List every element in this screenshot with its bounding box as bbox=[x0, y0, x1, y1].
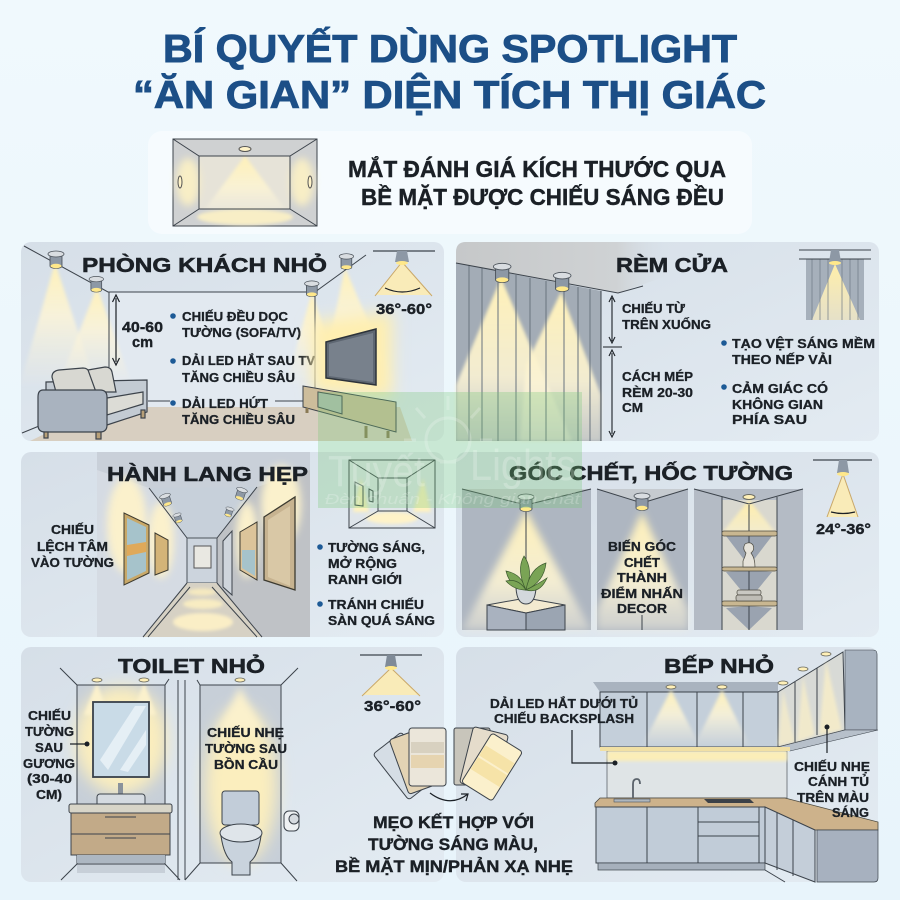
heading: GÓC CHẾT, HỐC TƯỜNG bbox=[509, 461, 793, 485]
icon: beam angle 36-60 bbox=[373, 251, 435, 318]
panel: narrow corridor bbox=[21, 452, 444, 637]
label: cabinet doors bbox=[794, 724, 870, 820]
left label: CHIẾU bbox=[51, 522, 94, 537]
upper cabinets bbox=[593, 650, 878, 751]
heading: PHÒNG KHÁCH NHỎ bbox=[82, 253, 327, 277]
labels: CM) bbox=[36, 788, 62, 802]
bullets: RANH GIỚI bbox=[328, 572, 402, 587]
bullets: SÀN QUÁ SÁNG bbox=[328, 613, 435, 628]
curtain bbox=[456, 263, 643, 441]
panel: intro bbox=[148, 131, 752, 234]
bullets: DẢI LED HỨT bbox=[182, 396, 268, 411]
dimension arrow 40-60 cm: cm bbox=[132, 334, 153, 351]
bullets bbox=[721, 336, 875, 427]
icon: colour swatches bbox=[373, 727, 523, 801]
arrows bbox=[603, 296, 622, 437]
tip text: MẸO KẾT HỢP VỚI bbox=[373, 813, 534, 832]
icon: beam angle 36-60: 36°-60° bbox=[364, 698, 421, 715]
bullets: TRÁNH CHIẾU bbox=[328, 597, 424, 612]
corridor scene bbox=[97, 452, 310, 637]
panel: curtains bbox=[456, 242, 879, 441]
watermark text bbox=[325, 441, 581, 508]
intro text bbox=[348, 155, 726, 210]
left label: LỆCH TÂM bbox=[37, 539, 108, 554]
bullets: DẢI LED HẮT SAU TV bbox=[182, 353, 316, 368]
light cones bbox=[20, 263, 396, 385]
corridor spots bbox=[159, 486, 248, 524]
labels: CÁCH MÉP bbox=[622, 369, 693, 384]
label: cabinet doors: SÁNG bbox=[832, 805, 869, 820]
bullets: TƯỜNG SÁNG, bbox=[328, 540, 425, 555]
vanity room bbox=[60, 668, 185, 880]
watermark text: Đèn chuẩn - Không gian chất bbox=[325, 491, 581, 508]
bullets: TƯỜNG (SOFA/TV) bbox=[182, 325, 301, 340]
labels bbox=[622, 301, 711, 415]
left label bbox=[31, 522, 114, 570]
scene: middle with label bbox=[597, 489, 688, 630]
scene: middle with label: DECOR bbox=[617, 602, 667, 616]
tip text: BỀ MẶT MỊN/PHẢN XẠ NHẸ bbox=[335, 857, 573, 876]
icon: beam angle 24-36: 24°-36° bbox=[816, 521, 871, 538]
heading: HÀNH LANG HẸP bbox=[107, 463, 308, 486]
scene: middle with label: BIẾN GÓC bbox=[608, 539, 676, 554]
icon: lit room bbox=[173, 139, 317, 226]
dimension arrow 40-60 cm: 40-60 bbox=[122, 319, 163, 336]
intro text: MẮT ĐÁNH GIÁ KÍCH THƯỚC QUA bbox=[348, 155, 726, 182]
bullets: PHÍA SAU bbox=[732, 412, 807, 427]
bullets: TĂNG CHIỀU SÂU bbox=[182, 370, 295, 385]
scene: middle with label: THÀNH bbox=[617, 570, 667, 585]
bullets: KHÔNG GIAN bbox=[732, 397, 823, 412]
label: cabinet doors: CÁNH TỦ bbox=[808, 774, 869, 789]
counter bbox=[595, 798, 878, 830]
bullets: MỞ RỘNG bbox=[328, 556, 397, 571]
panel: living room bbox=[20, 242, 444, 441]
tv console bbox=[303, 386, 396, 438]
scene: middle with label: ĐIỂM NHẤN bbox=[601, 586, 683, 601]
label: cabinet doors: CHIẾU NHẸ bbox=[794, 759, 870, 774]
heading: TOILET NHỎ bbox=[118, 654, 265, 678]
tip text bbox=[335, 813, 573, 876]
bullets: TĂNG CHIỀU SÂU bbox=[182, 412, 295, 427]
watermark text: Tuyết bbox=[328, 447, 425, 496]
backsplash bbox=[600, 747, 790, 798]
labels: CHIẾU NHẸ bbox=[207, 725, 284, 740]
labels: SAU bbox=[35, 741, 63, 755]
watermark bbox=[318, 392, 582, 508]
heading: BẾP NHỎ bbox=[664, 654, 774, 678]
title: BÍ QUYẾT DÙNG SPOTLIGHT bbox=[163, 27, 737, 71]
title bbox=[133, 27, 766, 117]
base cabinets bbox=[596, 807, 878, 882]
intro text: BỀ MẶT ĐƯỢC CHIẾU SÁNG ĐỀU bbox=[361, 183, 724, 210]
tip text: TƯỜNG SÁNG MÀU, bbox=[368, 835, 538, 854]
bullets: THEO NẾP VẢI bbox=[732, 352, 832, 367]
label: backsplash: CHIẾU BACKSPLASH bbox=[494, 711, 634, 726]
labels: TƯỜNG SAU bbox=[205, 741, 287, 756]
labels: (30-40 bbox=[27, 772, 72, 786]
sofa bbox=[38, 367, 147, 439]
icon: beam angle 36-60: 36°-60° bbox=[376, 301, 432, 318]
labels bbox=[23, 708, 287, 802]
bullets: CHIẾU ĐỀU DỌC bbox=[182, 309, 288, 324]
icon: room plan bbox=[349, 460, 435, 528]
labels: TƯỜNG bbox=[25, 724, 74, 739]
labels: GƯƠNG bbox=[23, 757, 75, 771]
labels: TRÊN XUỐNG bbox=[622, 317, 711, 332]
ceiling spots bbox=[48, 251, 354, 297]
left label: VÀO TƯỜNG bbox=[31, 555, 114, 570]
scene: plant corner bbox=[462, 489, 591, 630]
bullets bbox=[317, 540, 435, 628]
bullets bbox=[170, 309, 316, 427]
title: “ĂN GIAN” DIỆN TÍCH THỊ GIÁC bbox=[133, 73, 766, 117]
labels: CHIẾU TỪ bbox=[622, 301, 686, 316]
label: backsplash: DẢI LED HẮT DƯỚI TỦ bbox=[490, 696, 638, 711]
panel: small toilet bbox=[21, 647, 444, 882]
panel: small kitchen bbox=[456, 647, 878, 882]
back wall bbox=[109, 292, 315, 407]
panel: dead corners bbox=[456, 452, 879, 637]
sink and cooktop bbox=[614, 779, 754, 803]
icon: beam angle 24-36 bbox=[813, 460, 872, 538]
scene: corner shelves bbox=[694, 489, 803, 630]
tv with glow bbox=[312, 312, 392, 398]
labels: CHIẾU bbox=[28, 708, 71, 723]
toilet room bbox=[185, 668, 298, 881]
dimension arrow 40-60 cm bbox=[112, 295, 163, 365]
ceiling bbox=[456, 242, 670, 293]
bullets: TẠO VỆT SÁNG MỀM bbox=[732, 336, 875, 351]
wall lines bbox=[22, 246, 366, 433]
scene: middle with label: CHẾT bbox=[624, 555, 660, 570]
icon: beam angle 36-60 bbox=[360, 655, 422, 715]
label: cabinet doors: TRÊN MÀU bbox=[797, 790, 869, 805]
labels: BỒN CẦU bbox=[214, 757, 278, 772]
bullets: CẢM GIÁC CÓ bbox=[732, 381, 828, 396]
label: backsplash bbox=[490, 696, 638, 766]
icon: curtain spot bbox=[799, 250, 871, 320]
labels: RÈM 20-30 bbox=[622, 385, 693, 400]
spots bbox=[493, 263, 571, 291]
arrow: swatches bbox=[430, 793, 468, 801]
floor bbox=[30, 407, 412, 441]
icon: toilet paper bbox=[284, 811, 299, 831]
labels: CM bbox=[622, 401, 643, 415]
heading: RÈM CỬA bbox=[616, 253, 728, 277]
watermark bulb bbox=[404, 396, 492, 462]
watermark text: Lights bbox=[470, 441, 576, 490]
